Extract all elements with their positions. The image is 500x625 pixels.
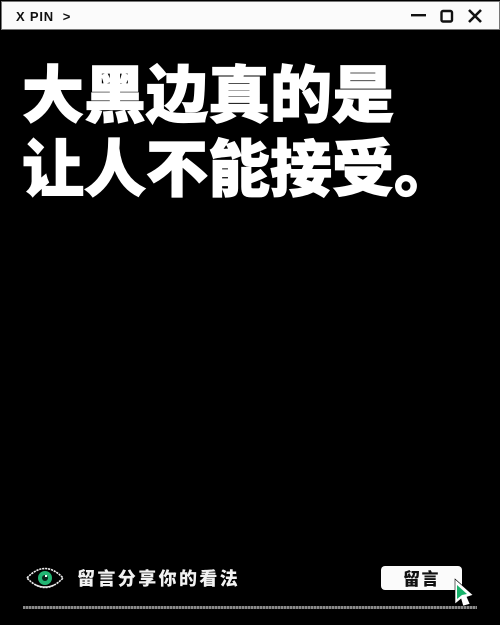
icon: maximize bbox=[442, 11, 452, 22]
icon: cursor bbox=[454, 578, 472, 606]
icon: minimize bbox=[411, 14, 426, 16]
button label: 留言 bbox=[403, 565, 440, 590]
window title text: X PIN > bbox=[16, 9, 71, 24]
window title bar bbox=[1, 1, 500, 30]
title bbox=[22, 45, 456, 209]
call to action text: 留言分享你的看法 bbox=[77, 565, 240, 591]
icon: close bbox=[469, 10, 481, 22]
window controls bbox=[411, 9, 482, 23]
title: 让人不能接受。 bbox=[22, 119, 456, 209]
title: 大黑边真的是 bbox=[22, 45, 394, 135]
comment button bbox=[381, 566, 462, 590]
icon: eye bbox=[26, 568, 64, 588]
bottom dotted line bbox=[23, 606, 477, 609]
